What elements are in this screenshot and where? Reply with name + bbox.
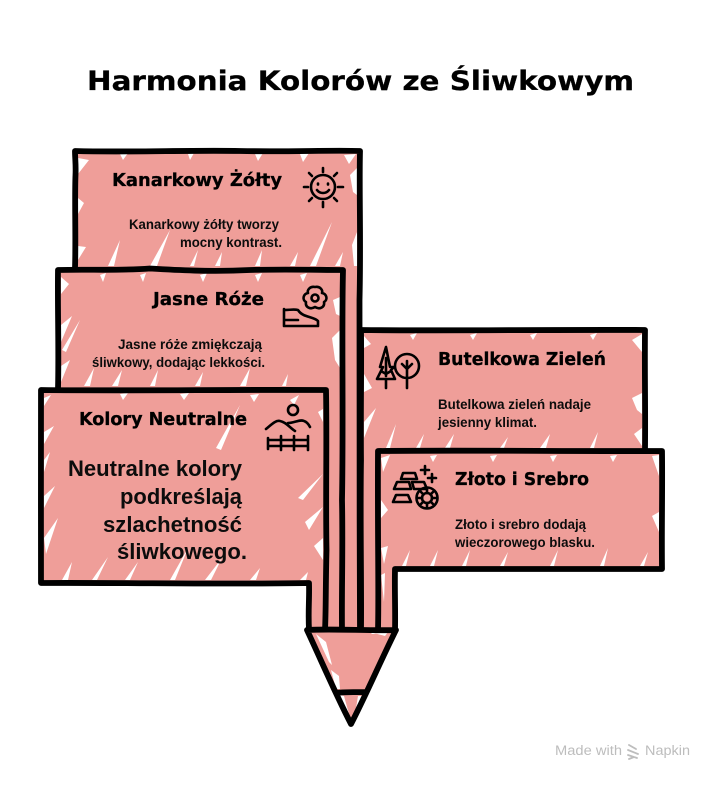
heading: Kanarkowy Żółty xyxy=(112,169,282,191)
panel: Jasne Róże xyxy=(58,268,343,630)
description: podkreślają xyxy=(120,484,243,509)
description xyxy=(437,397,591,430)
watermark: Made with Napkin: Made with xyxy=(555,743,622,758)
description xyxy=(68,456,247,564)
description xyxy=(129,217,282,250)
heading: Butelkowa Zieleń xyxy=(438,350,606,370)
description: wieczorowego blasku. xyxy=(454,535,595,550)
icon: landscape with fence xyxy=(266,405,310,450)
description: śliwkowy, dodając lekkości. xyxy=(92,355,265,370)
icon: trees xyxy=(377,347,419,388)
pencil tip xyxy=(307,630,396,724)
panel: Butelkowa Zieleń xyxy=(361,330,645,630)
watermark: Made with Napkin xyxy=(555,743,690,759)
icon: flower and shoe xyxy=(284,287,326,326)
icon: Napkin logo xyxy=(628,745,638,759)
heading: Jasne Róże xyxy=(151,289,264,310)
description: Kanarkowy żółty tworzy xyxy=(129,217,279,232)
icon: gold bars and gem xyxy=(393,466,438,508)
description: szlachetność xyxy=(103,512,242,537)
description: śliwkowego. xyxy=(117,539,247,564)
description: Neutralne kolory xyxy=(68,456,243,481)
heading: Kolory Neutralne xyxy=(79,410,247,430)
panel: Kolory Neutralne xyxy=(41,390,327,630)
panel: Złoto i Srebro xyxy=(378,451,662,630)
description xyxy=(454,517,595,550)
description: Butelkowa zieleń nadaje xyxy=(438,397,591,412)
description: mocny kontrast. xyxy=(180,235,282,250)
heading: Złoto i Srebro xyxy=(455,470,589,490)
description: Złoto i srebro dodają xyxy=(455,517,586,532)
icon: smiling sun xyxy=(304,168,343,207)
panel: Kanarkowy Żółty xyxy=(75,151,360,630)
description xyxy=(92,337,265,370)
description: jesienny klimat. xyxy=(437,415,537,430)
description: Jasne róże zmiękczają xyxy=(118,337,262,352)
watermark: Made with Napkin: Napkin xyxy=(645,743,690,758)
title: Harmonia Kolorów ze Śliwkowym xyxy=(87,65,634,97)
